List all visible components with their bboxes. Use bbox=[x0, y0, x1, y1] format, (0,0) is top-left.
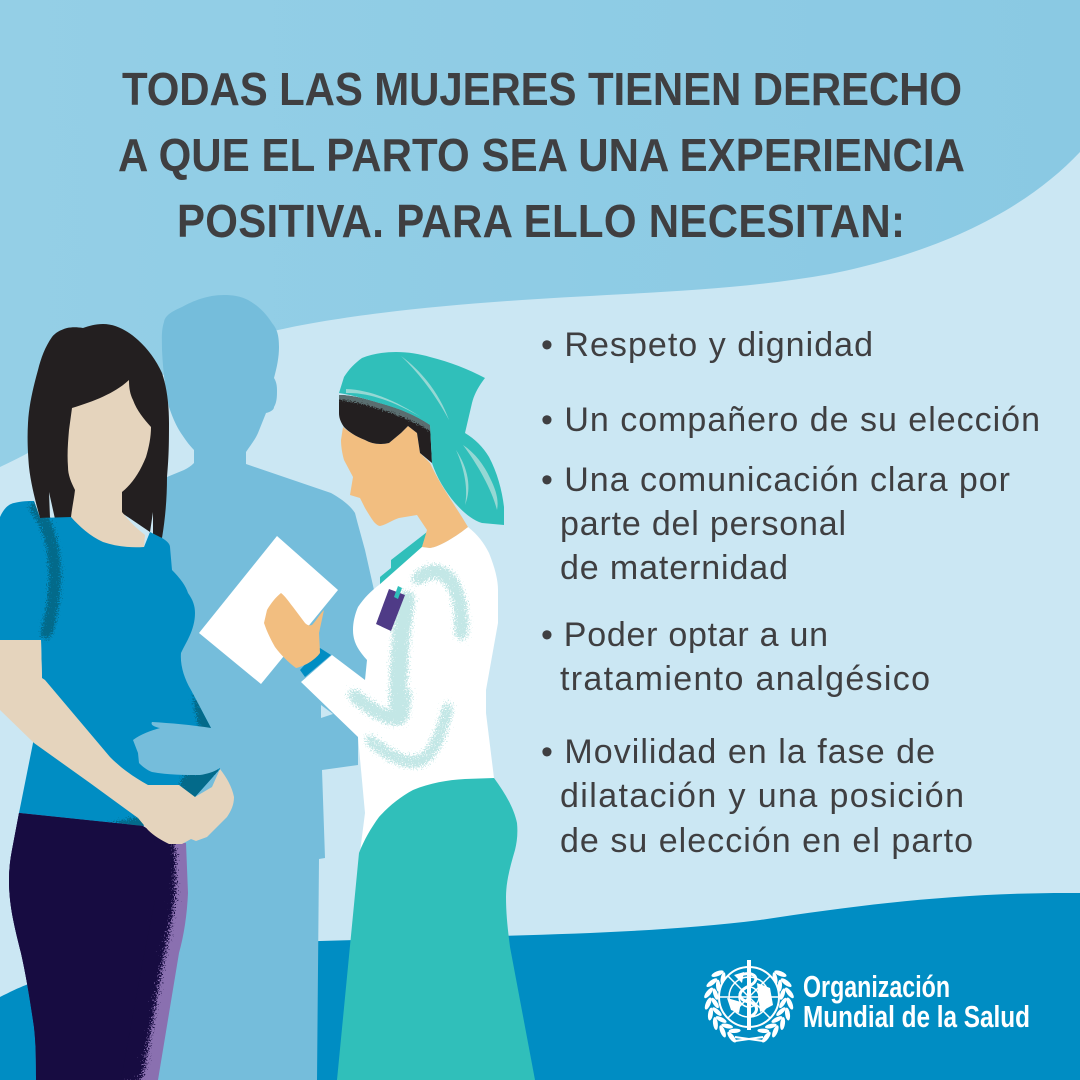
icon: WHO emblem bbox=[702, 960, 796, 1045]
hair highlight bbox=[335, 393, 437, 428]
item: pain relief: • Poder optar a un bbox=[541, 616, 828, 654]
woman face and neck bbox=[68, 380, 151, 547]
organisation name bbox=[803, 969, 1030, 1034]
woman hair bbox=[28, 324, 169, 538]
item: pain relief: tratamiento analgésico bbox=[560, 660, 930, 698]
scarf highlights bbox=[346, 356, 498, 510]
sleeve shading bbox=[348, 571, 461, 763]
item: respect: • Respeto y dignidad bbox=[541, 326, 873, 364]
midwife headscarf bbox=[339, 352, 504, 525]
woman shirt bbox=[0, 501, 220, 826]
item: mobility: de su elección en el parto bbox=[560, 822, 973, 860]
organisation name: Organización bbox=[803, 969, 950, 1004]
companion hand on belly bbox=[133, 722, 240, 775]
midwife white coat bbox=[301, 527, 498, 852]
list of needs bbox=[541, 326, 1040, 860]
midwife hand bbox=[264, 593, 324, 668]
figure: pregnant woman bbox=[0, 324, 225, 1080]
item: communication: de maternidad bbox=[560, 549, 788, 587]
item: mobility: • Movilidad en la fase de bbox=[541, 733, 935, 771]
gap under companion arm bbox=[321, 705, 333, 718]
background: bottom blue wave bbox=[0, 893, 1080, 1080]
figure: midwife bbox=[199, 352, 535, 1080]
midwife hair bbox=[339, 395, 432, 463]
name badge bbox=[376, 586, 405, 631]
shirt shading bbox=[30, 503, 225, 835]
woman trousers bbox=[9, 813, 188, 1080]
title: A QUE EL PARTO SEA UNA EXPERIENCIA bbox=[118, 130, 965, 181]
midwife cuff bbox=[300, 648, 331, 677]
figure: companion silhouette bbox=[158, 295, 375, 1080]
midwife collar bbox=[380, 532, 427, 585]
item: pain relief bbox=[541, 616, 930, 698]
title: POSITIVA. PARA ELLO NECESITAN: bbox=[177, 196, 905, 247]
item: communication: parte del personal bbox=[560, 505, 846, 543]
item: communication bbox=[541, 461, 1010, 587]
item: companion: • Un compañero de su elección bbox=[541, 401, 1040, 439]
woman arm and hands bbox=[0, 640, 234, 844]
item: mobility: dilatación y una posición bbox=[560, 777, 964, 815]
item: communication: • Una comunicación clara por bbox=[541, 461, 1010, 499]
midwife skirt bbox=[337, 778, 535, 1080]
background: top sky wave bbox=[0, 0, 1080, 467]
title: TODAS LAS MUJERES TIENEN DERECHO bbox=[122, 64, 962, 115]
WHO logo bbox=[702, 960, 1030, 1045]
clipboard paper bbox=[199, 536, 338, 684]
item: mobility bbox=[541, 733, 973, 860]
midwife face and neck bbox=[341, 426, 468, 548]
title bbox=[118, 64, 965, 247]
